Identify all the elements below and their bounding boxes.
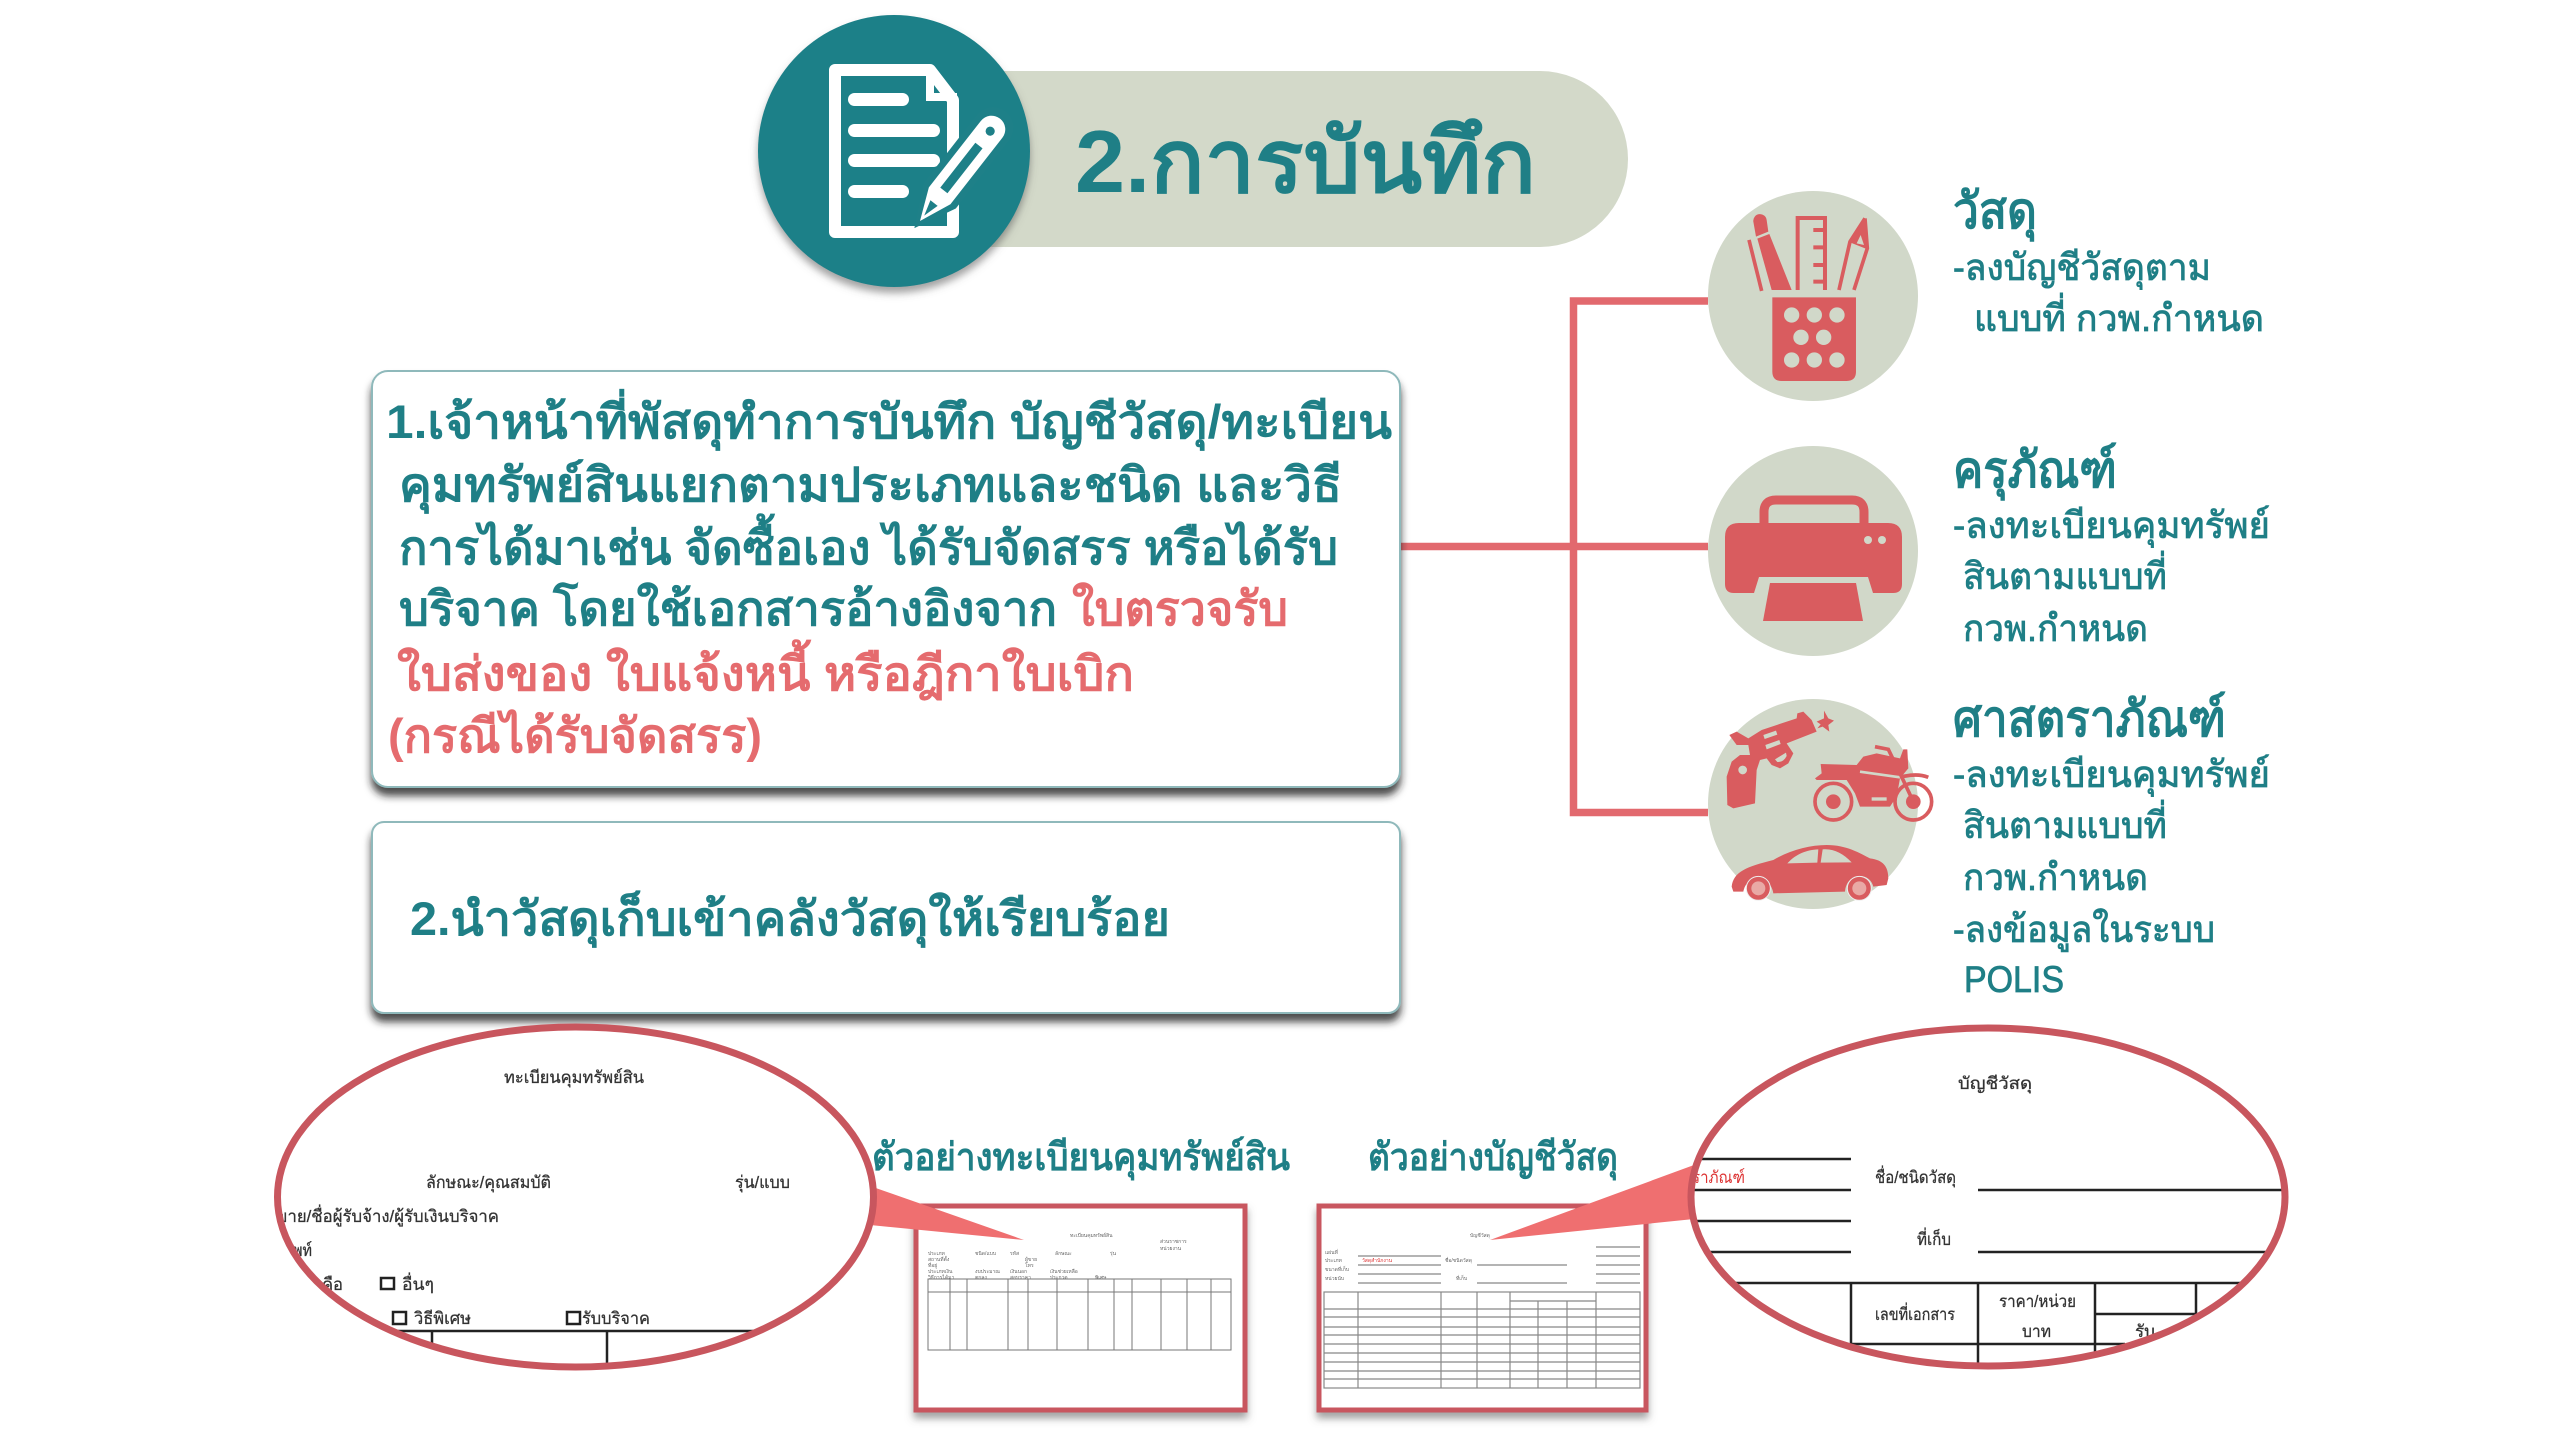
sample document: asset register: รุ่น: [1110, 1251, 1117, 1257]
item: weapons text: POLIS: [1964, 959, 2064, 1000]
magnified account text: ราภัณฑ์: [1692, 1168, 1745, 1187]
sample document: asset register: ที่อยู่: [928, 1262, 937, 1269]
sample document: supplies account: ที่เก็บ: [1456, 1274, 1467, 1282]
sample document: supplies account: แผ่นที่: [1325, 1249, 1338, 1256]
item: weapons text: -ลงทะเบียนคุมทรัพย์: [1953, 754, 2270, 797]
step 1 text: คุมทรัพย์สินแยกตามประเภทและชนิด และวิธี: [399, 458, 1342, 514]
magnified account text: เลขที่เอกสาร: [1875, 1302, 1955, 1324]
magnified register text: รับบริจาค: [582, 1309, 650, 1328]
magnified register text: คือ: [322, 1275, 343, 1294]
item: supplies icon: [1708, 191, 1918, 401]
magnified register text: รุ่น/แบบ: [735, 1173, 790, 1193]
sample document: supplies account: วัสดุสำนักงาน: [1362, 1258, 1393, 1264]
item: weapons text: สินตามแบบที่: [1963, 799, 2167, 846]
title circle: [758, 15, 1030, 287]
sample document: asset register: สถานที่ตั้ง: [928, 1254, 950, 1263]
icon: document and pencil: [835, 68, 1022, 241]
step 1 text: ใบตรวจรับ: [1072, 581, 1288, 635]
label: supplies account sample: ตัวอย่างบัญชีวัสดุ: [1368, 1137, 1618, 1181]
magnified register text: พท์: [293, 1241, 312, 1260]
panel: recording step 2: [372, 822, 1400, 1013]
item: equipment text: ครุภัณฑ์: [1953, 442, 2117, 501]
sample document: asset register: ชนิด/แบบ: [975, 1250, 996, 1257]
sample document: asset register: โทร: [1025, 1262, 1034, 1269]
sample document: asset register: เงินช่วยเหลือ: [1050, 1268, 1078, 1275]
sample document: asset register: ทะเบียนคุมทรัพย์สิน: [1070, 1232, 1113, 1239]
sample document: asset register: พิเศษ: [1095, 1274, 1107, 1281]
sample document: asset register: เงินนอก: [1010, 1268, 1027, 1275]
sample document: supplies account: หน่วยนับ: [1325, 1276, 1344, 1282]
sample document: asset register: ลักษณะ: [1055, 1251, 1072, 1257]
callout pointer: left: [870, 1186, 1024, 1240]
sample document: supplies account: ขนาดที่เก็บ: [1325, 1265, 1349, 1273]
magnified account text: บาท: [2022, 1322, 2051, 1341]
item: supplies text: วัสดุ: [1953, 183, 2037, 242]
item: equipment icon: [1708, 446, 1918, 656]
item: weapons text: -ลงข้อมูลในระบบ: [1953, 908, 2215, 952]
item: equipment text: [1953, 442, 2270, 649]
step 1 text: [386, 388, 1392, 762]
step 1 text: (กรณีได้รับจัดสรร): [388, 708, 762, 762]
sample document: asset register: งบประมาณ: [975, 1269, 1000, 1275]
step 1 text: บริจาค โดยใช้เอกสารอ้างอิงจาก: [399, 581, 1057, 635]
sample document: asset register: ผู้ขาย: [1025, 1256, 1037, 1263]
magnifier: supplies account detail: [1680, 1028, 2290, 1380]
item: equipment text: -ลงทะเบียนคุมทรัพย์: [1953, 505, 2270, 548]
sample document: asset register: [916, 1206, 1245, 1410]
item: supplies text: แบบที่ กวพ.กำหนด: [1974, 292, 2264, 339]
sample document: asset register: ตกลง: [975, 1275, 987, 1281]
title banner: [758, 15, 1628, 287]
item: supplies text: [1953, 183, 2264, 339]
item: weapons and vehicles icon: [1708, 699, 1932, 909]
sample document: asset register: หน่วยงาน: [1160, 1246, 1182, 1252]
item: supplies text: -ลงบัญชีวัสดุตาม: [1953, 247, 2211, 290]
magnified account text: [1692, 1074, 2155, 1341]
magnified account text: ราคา/หน่วย: [1999, 1292, 2076, 1311]
callout pointer: right: [1490, 1165, 1694, 1240]
item: weapons text: ศาสตราภัณฑ์: [1953, 691, 2226, 747]
sample document: asset register: ส่วนราชการ: [1160, 1239, 1187, 1245]
sample document: asset register: ประเภท: [928, 1251, 945, 1257]
sample document: supplies account: ประเภท: [1325, 1258, 1342, 1264]
item: weapons text: กวพ.กำหนด: [1963, 857, 2148, 898]
title text: 2.การบันทึก: [1075, 112, 1536, 211]
magnified account text: บัญชีวัสดุ: [1958, 1074, 2032, 1094]
item: equipment text: กวพ.กำหนด: [1963, 608, 2148, 649]
sample document: supplies account: ชื่อ/ชนิดวัสดุ: [1445, 1257, 1472, 1264]
panel: recording step 1: [372, 371, 1400, 787]
step 1 text: 1.เจ้าหน้าที่พัสดุทำการบันทึก บัญชีวัสดุ/ทะเบียน: [386, 388, 1392, 451]
sample document: asset register: ประกวด: [1050, 1275, 1068, 1281]
magnified register text: ลักษณะ/คุณสมบัติ: [426, 1173, 551, 1193]
sample document: supplies account: บัญชีวัสดุ: [1470, 1232, 1490, 1239]
sample document: asset register: รหัส: [1010, 1251, 1019, 1257]
magnified register text: ทะเบียนคุมทรัพย์สิน: [504, 1068, 644, 1088]
step 1 text: การได้มาเช่น จัดซื้อเอง ได้รับจัดสรร หรือได้รับ: [399, 513, 1338, 574]
item: equipment text: สินตามแบบที่: [1963, 550, 2167, 597]
sample document: asset register: ประเภทเงิน: [928, 1268, 953, 1275]
sample document: asset register: วิธีการได้มา: [928, 1274, 954, 1281]
connector lines: [1400, 301, 1708, 812]
magnified register text: อื่นๆ: [402, 1272, 434, 1294]
step 2 text: 2.นำวัสดุเก็บเข้าคลังวัสดุให้เรียบร้อย: [410, 889, 1170, 948]
sample document: supplies account: [1319, 1206, 1646, 1410]
magnified account text: ชื่อ/ชนิดวัสดุ: [1875, 1165, 1956, 1188]
sample document: asset register: สอบราคา: [1010, 1275, 1031, 1281]
magnified register text: [276, 1068, 790, 1328]
item: weapons text: [1953, 691, 2270, 1000]
label: asset register sample: ตัวอย่างทะเบียนคุมทรัพย์สิน: [872, 1136, 1290, 1181]
title pill: [894, 71, 1628, 247]
magnified account text: ที่เก็บ: [1917, 1227, 1951, 1249]
magnified account text: รับ: [2135, 1322, 2155, 1341]
magnified register text: ขาย/ชื่อผู้รับจ้าง/ผู้รับเงินบริจาค: [276, 1204, 499, 1227]
magnifier: asset register detail: [276, 1027, 874, 1370]
step 1 text: ใบส่งของ ใบแจ้งหนี้ หรือฎีกาใบเบิก: [397, 639, 1134, 700]
magnified register text: วิธีพิเศษ: [414, 1309, 471, 1328]
